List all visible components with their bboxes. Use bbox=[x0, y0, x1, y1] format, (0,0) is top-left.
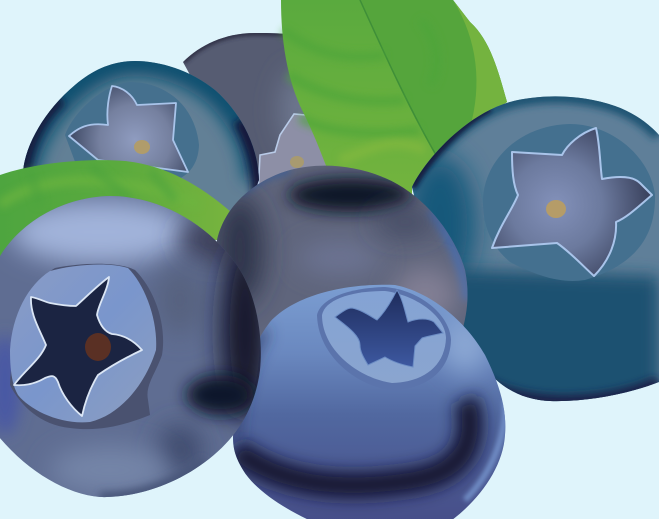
seed spot of right berry bbox=[546, 200, 566, 218]
star of right berry bbox=[492, 128, 652, 276]
berry: back grey bbox=[183, 33, 326, 185]
calyx of front berry bbox=[317, 287, 451, 390]
berry: middle dark bbox=[216, 166, 468, 337]
star of front berry bbox=[335, 290, 443, 367]
berry: left large bbox=[0, 190, 270, 505]
berry: top-left teal bbox=[23, 61, 259, 211]
berry: front bbox=[225, 280, 515, 519]
star of left berry bbox=[14, 277, 142, 416]
berry: right bbox=[412, 96, 659, 402]
leaf: left bbox=[0, 160, 231, 270]
star of top-left berry bbox=[69, 86, 188, 172]
calyx shadow of left berry bbox=[10, 264, 163, 429]
leaf: top bbox=[281, 0, 507, 200]
stem dot of left berry bbox=[85, 333, 111, 361]
seed spot of top-left berry bbox=[134, 140, 150, 154]
calyx of left berry bbox=[10, 264, 156, 422]
star of back berry bbox=[258, 113, 326, 184]
